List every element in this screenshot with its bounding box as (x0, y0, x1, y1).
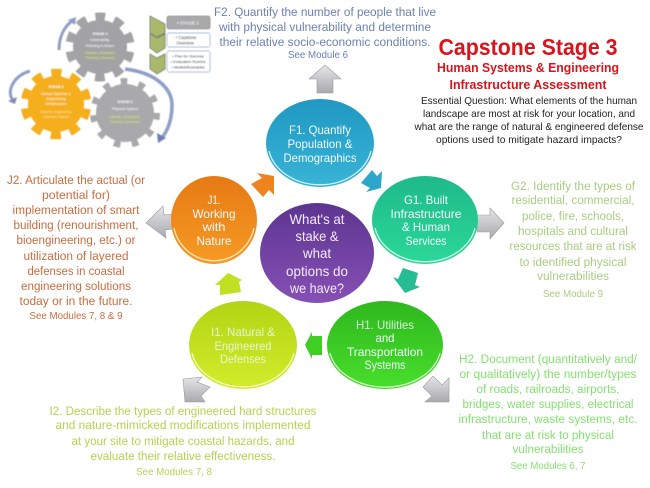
text block: H2: bridges, water supplies, electrical (462, 397, 634, 411)
arrow: G1 to G2 (477, 208, 504, 239)
process thumbnail: capstone stage gears (8, 13, 210, 144)
node: J1: Nature (196, 234, 232, 248)
text block: F2: with physical vulnerability and determine (218, 20, 431, 34)
essential question: landscape are most at risk for your location, and (423, 109, 635, 120)
gear: stage 2 highlighted: Engineering (46, 97, 66, 101)
chevron navigation list: • STAGE 1 (177, 20, 199, 26)
gear: stage 2 highlighted: Human Systems & (41, 92, 71, 96)
node: G1: G1. Built (404, 193, 449, 207)
node: G1 (372, 176, 478, 264)
arrow: G1 to H1 (393, 268, 420, 293)
essential question: Essential Question: What elements of the human (421, 96, 637, 107)
text block: J2: potential for) (42, 188, 110, 202)
text block: I2: I2. Describe the types of engineered hard structures (50, 404, 316, 418)
text block: J2: See Modules 7, 8 & 9 (30, 311, 123, 322)
text block: G2 (510, 179, 637, 300)
text block: H2 (458, 352, 638, 472)
gear: stage 2 highlighted: STAGE 2 (48, 85, 64, 89)
node: G1: Services (406, 234, 447, 248)
gear: stage 2 highlighted: Hazards, Engineering, (40, 110, 72, 114)
text block: H2: H2. Document (quantitatively and/ (459, 352, 638, 366)
node: I1: Engineered (214, 339, 272, 353)
text block: G2: resources that are at risk (510, 239, 637, 253)
title block (437, 34, 619, 92)
text block: G2: police, fire, schools, (522, 209, 624, 223)
gear: stage 3: Coastal & Shoreline (110, 120, 140, 124)
gear: stage 4: Hazards, Adaptation (85, 51, 115, 55)
arrow: J1 to F1 (251, 173, 274, 197)
gear: stage 2 highlighted (21, 69, 91, 139)
arrow: H1 to H2 (423, 376, 449, 402)
text block: J2: bioengineering, etc.) or (16, 233, 136, 247)
chevron navigation list: • Models/Examples (171, 64, 205, 70)
text block: F2: their relative socio-economic conditions. (220, 35, 430, 49)
arrow: J1 to J2 (146, 206, 173, 238)
arrow: H1 to I1 (305, 332, 322, 359)
node: center question (260, 203, 374, 303)
essential question (414, 96, 644, 146)
essential question: options used to mitigate hazard impacts? (436, 135, 622, 146)
node: H1: Transportation (347, 345, 423, 359)
text block: J2: today or in the future. (20, 294, 132, 308)
gear: stage 4: Vulnerability, (90, 38, 110, 42)
node: H1: Systems (364, 358, 406, 372)
title block: Infrastructure Assessment (450, 78, 607, 92)
chevron navigation list: Overview (176, 40, 195, 46)
text block: J2: engineering solutions (21, 279, 131, 293)
text block: J2 (7, 173, 145, 322)
gear: stage 4: Planning & Action (86, 44, 114, 48)
text block: F2: F2. Quantify the number of people that live (214, 5, 436, 19)
node: I1: I1. Natural & (211, 325, 275, 339)
text block: G2: See Module 9 (543, 289, 603, 300)
node: J1: J1. (208, 193, 220, 207)
gear: stage 4: STAGE 4 (92, 32, 108, 36)
chevron navigation list: • Evaluation Rubrics (171, 59, 205, 64)
arrow: I1 to J1 (215, 273, 242, 295)
node: H1 (327, 301, 443, 389)
gear: stage 3 (94, 82, 156, 144)
text block: I2: See Modules 7, 8 (136, 467, 212, 478)
node: H1: H1. Utilities (356, 318, 414, 332)
node: center question: What's at (290, 212, 345, 227)
arrow: top curved arrow (59, 17, 76, 50)
node: center question: we have? (289, 281, 344, 296)
node: I1: Defenses (220, 352, 266, 366)
gear: stage 4 (66, 13, 134, 81)
text block: G2: residential, commercial, (512, 193, 634, 207)
arrow: large right curved arrow (125, 69, 172, 143)
arrow: I1 to I2 (183, 377, 210, 402)
chevron navigation list (150, 16, 210, 74)
text block: J2: utilization of layered (24, 249, 129, 263)
node: F1: Population & (288, 137, 353, 151)
node: G1: Infrastructure (390, 207, 462, 221)
text block: J2: implementation of smart (12, 203, 140, 217)
title block: Capstone Stage 3 (438, 34, 618, 60)
text block: H2: vulnerabilities (512, 442, 584, 456)
chevron navigation list: • Plan for Success (172, 54, 204, 58)
gear: stage 3: STAGE 3 (117, 100, 133, 104)
gear: stage 2 highlighted: Infrastructure (45, 102, 67, 106)
text block: I2: evaluate their relative effectiveness. (90, 449, 276, 463)
text block: I2: and nature-mimicked modifications implemented (56, 418, 311, 432)
node: F1: Demographics (284, 151, 357, 165)
arrow: left curved arrow (8, 71, 30, 104)
text block: I2: at your site to mitigate coastal hazards, and (72, 434, 295, 448)
node: center question: stake & (296, 229, 338, 244)
text block: J2: J2. Articulate the actual (or (7, 173, 145, 187)
arrow: F1 to G1 (361, 170, 382, 192)
text block: J2: defenses in coastal (28, 264, 124, 278)
node: G1: & Human (402, 220, 450, 234)
text block: G2: hospitals and cultural (518, 224, 628, 238)
text block: I2 (50, 404, 316, 478)
gear: stage 3: Climate, Geography, (110, 115, 140, 119)
node: F1: F1. Quantify (289, 123, 351, 137)
node: center question: what (302, 246, 331, 261)
text block: F2: See Module 6 (288, 50, 348, 61)
text block: G2: to identified physical (520, 255, 626, 269)
arrow: F1 to F2 (309, 65, 341, 93)
text block: H2: of roads, railroads, airports, (476, 382, 620, 396)
text block: G2: vulnerabilities (537, 269, 609, 283)
text block: H2: infrastructure, waste systems, etc. (458, 412, 638, 426)
node: J1: with (201, 220, 226, 234)
node: F1 (266, 99, 374, 187)
title block: Human Systems & Engineering (437, 61, 619, 75)
text block: J2: building (renourishment, (14, 218, 138, 232)
text block: H2: See Modules 6, 7 (510, 461, 586, 472)
chevron navigation list: • Capstone (176, 35, 197, 40)
node: I1 (189, 301, 297, 389)
gear: stage 3: Physical System (112, 107, 138, 111)
gear: stage 2 highlighted: Defenses, Natural (43, 115, 69, 119)
essential question: what are the range of natural & engineered defense (414, 122, 644, 133)
text block: F2 (214, 5, 436, 61)
node: center question: options do (286, 264, 348, 279)
node: H1: and (376, 331, 394, 345)
gear: stage 4: Planning, Advocacy (85, 56, 115, 60)
node: J1 (171, 176, 257, 264)
text block: H2: that are at risk to physical (482, 428, 614, 442)
node: J1: Working (192, 207, 236, 221)
text block: H2: or qualitatively) the number/types (460, 367, 636, 381)
text block: G2: G2. Identify the types of (511, 179, 636, 193)
